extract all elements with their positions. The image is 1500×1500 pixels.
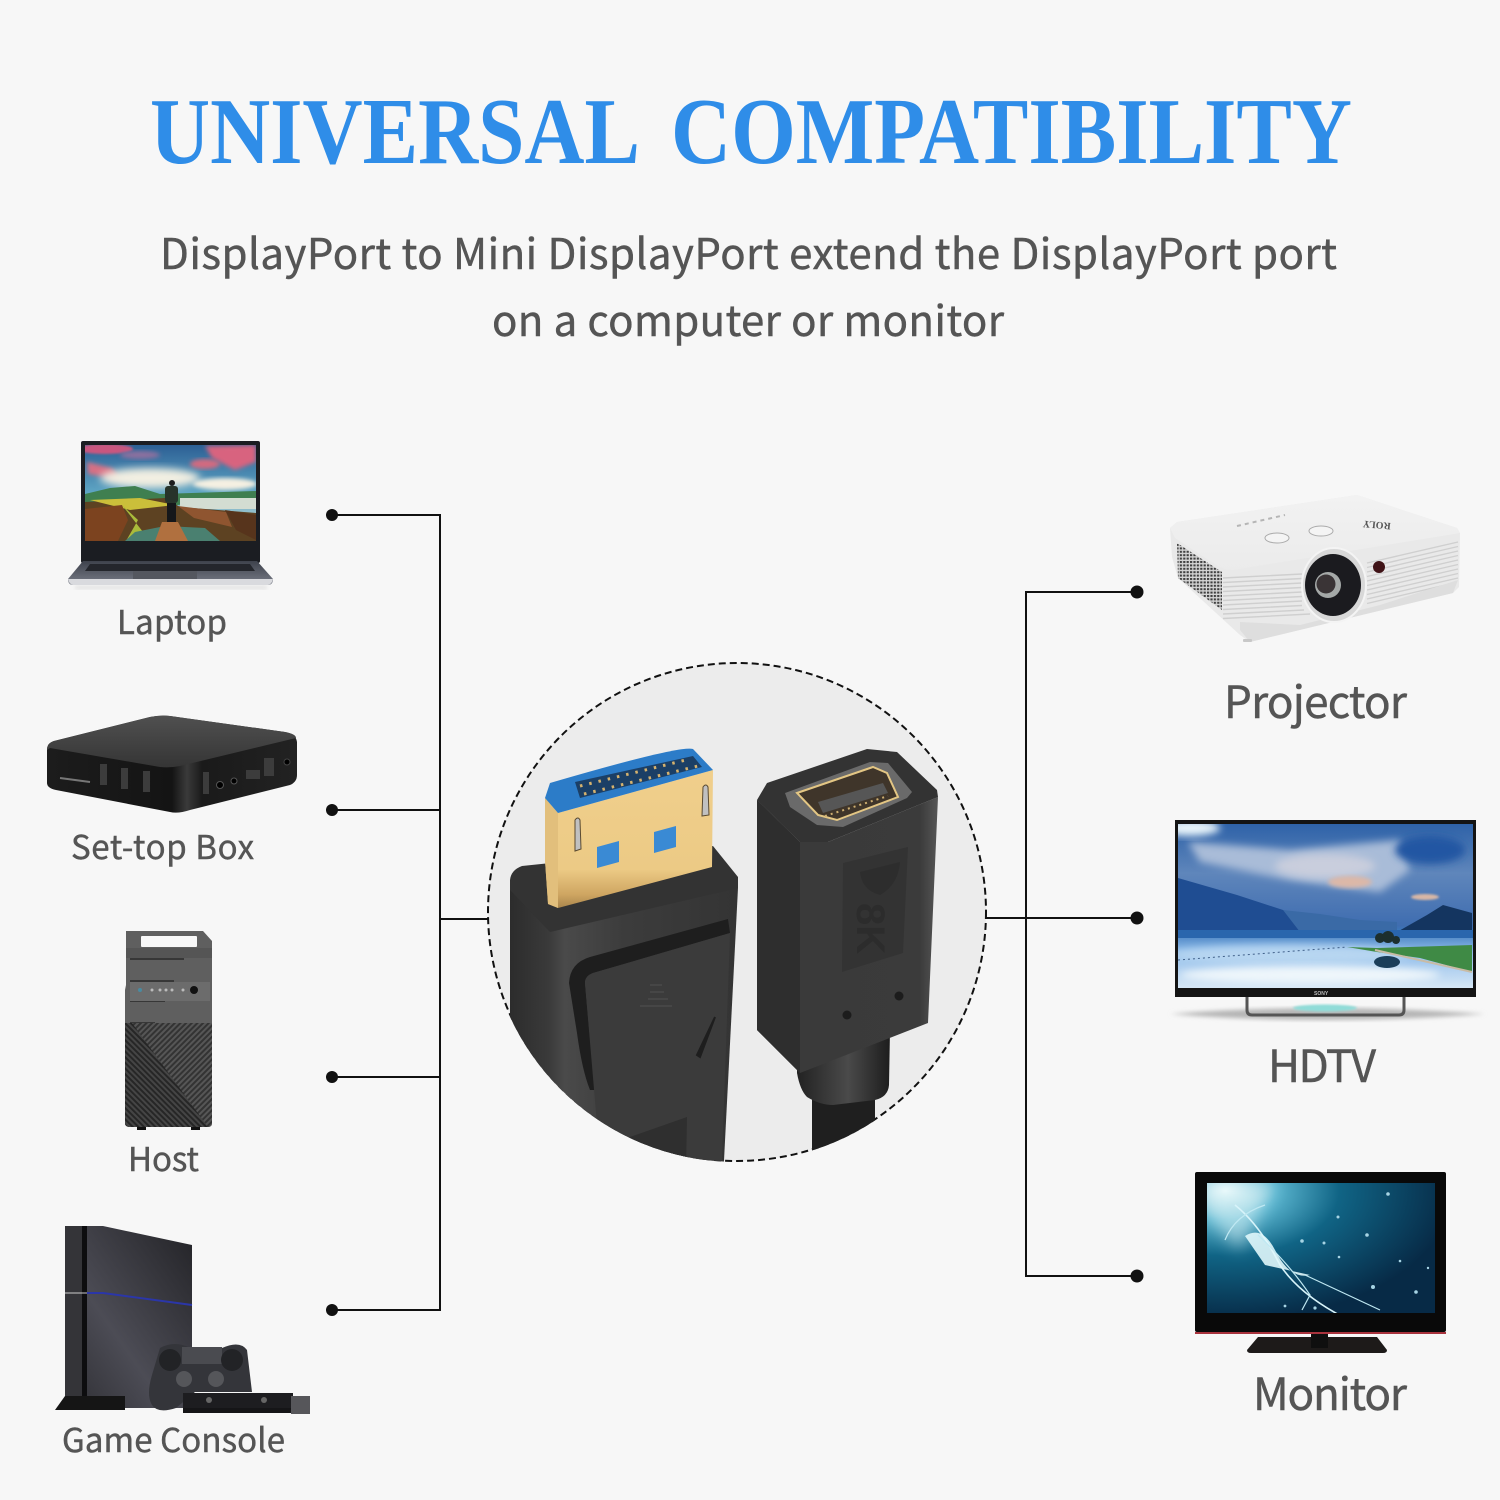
icon: host tower [125, 931, 212, 1130]
icon: game console with controller and camera [55, 1226, 310, 1414]
icon: set-top box [47, 716, 297, 813]
controller [149, 1344, 252, 1410]
Mini DisplayPort female connector [757, 749, 938, 1175]
icon: laptop [68, 441, 273, 589]
label: Projector: Projector [1224, 667, 1408, 731]
icon: monitor [1195, 1172, 1446, 1353]
label: Host: Host [128, 1133, 199, 1181]
connector lines: right devices [986, 586, 1144, 1282]
Mini DisplayPort female connector: 8K [848, 903, 892, 954]
label: HDTV: HDTV [1268, 1031, 1377, 1095]
subtitle text block: on a computer or monitor [492, 288, 1005, 349]
title [150, 80, 1352, 184]
panel: central dashed circle with connectors [488, 663, 986, 1180]
label: Laptop: Laptop [117, 596, 227, 644]
icon: HDTV [1160, 820, 1485, 1020]
label: Set-top Box: Set-top Box [71, 821, 254, 869]
label: Monitor: Monitor [1253, 1359, 1408, 1423]
title: UNIVERSAL [150, 80, 640, 184]
icon: HDTV: SONY [1314, 991, 1329, 997]
DisplayPort male connector [510, 846, 738, 1180]
lens [1302, 548, 1366, 622]
connector lines: left devices [326, 509, 488, 1316]
gold plug [545, 749, 713, 908]
icon: projector [1170, 495, 1460, 642]
label: Game Console: Game Console [62, 1414, 285, 1462]
camera [183, 1393, 310, 1414]
icon: projector: ROLY [1362, 518, 1391, 531]
subtitle text block: DisplayPort to Mini DisplayPort extend the DisplayPort port [160, 221, 1337, 282]
subtitle text block [160, 221, 1337, 349]
title: COMPATIBILITY [671, 80, 1352, 184]
